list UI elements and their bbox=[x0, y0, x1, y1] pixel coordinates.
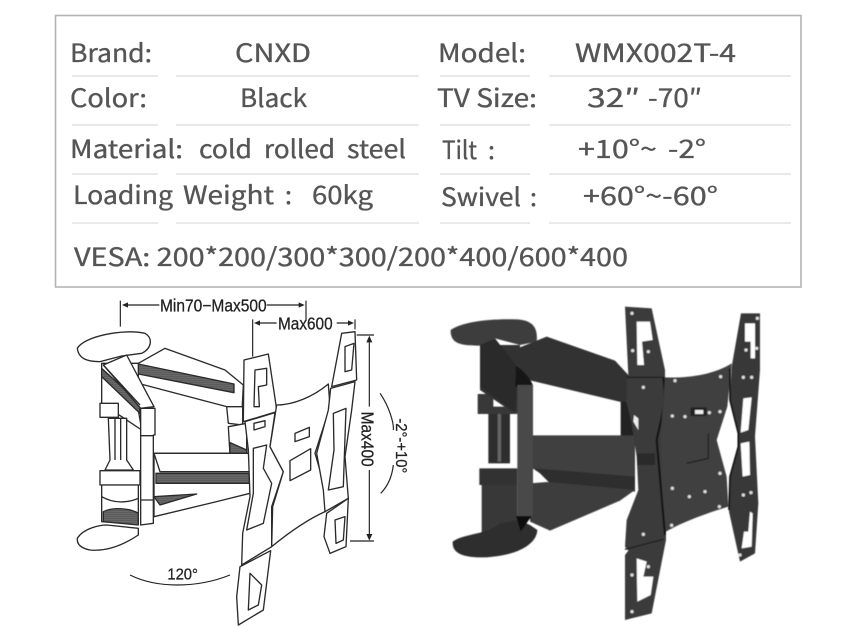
upper arm bbox=[517, 337, 628, 403]
dimension labels: Max400 bbox=[358, 412, 378, 467]
lower arms bbox=[621, 402, 635, 438]
text: tilt: Tilt bbox=[442, 131, 478, 167]
tv plate left bbox=[625, 307, 666, 620]
text: tv size: TV Size: bbox=[437, 79, 537, 115]
text: swivel: +60°~-60° bbox=[583, 177, 718, 213]
text: vesa sizes: VESA: 200*200/300*300/200*400/600*400 bbox=[74, 238, 628, 274]
text: loading weight bbox=[73, 176, 373, 212]
dimension labels: Min70−Max500 bbox=[160, 295, 267, 315]
text: material: Material: bbox=[70, 130, 183, 166]
text: material: steel bbox=[347, 130, 406, 166]
text: material: rolled bbox=[264, 130, 335, 166]
text: tilt: -2° bbox=[668, 130, 706, 166]
dimension labels: 120° bbox=[167, 566, 198, 583]
text: model: Model: bbox=[438, 34, 526, 70]
text: brand: Brand: bbox=[70, 34, 152, 70]
line art: central plate bbox=[270, 384, 330, 547]
text: tv size bbox=[437, 79, 702, 115]
text: swivel: Swivel bbox=[441, 178, 521, 214]
text: color: Color: bbox=[70, 79, 147, 115]
text: color: Black bbox=[240, 79, 307, 115]
central plate bbox=[661, 363, 732, 532]
text: swivel: : bbox=[530, 178, 537, 214]
mounting holes bbox=[630, 312, 759, 613]
text: tilt: : bbox=[488, 131, 495, 167]
text: tv size: -70″ bbox=[648, 79, 702, 115]
wall bracket bbox=[480, 345, 520, 413]
text: model: WMX002T-4 bbox=[575, 34, 736, 70]
text: tilt bbox=[442, 130, 706, 167]
dimension labels: Max600 bbox=[278, 313, 333, 333]
text: color bbox=[70, 79, 307, 115]
dimension labels: -2°-+10° bbox=[392, 418, 409, 473]
diagram: line drawing with dimensions bbox=[77, 295, 409, 625]
text: loading weight: : bbox=[285, 176, 292, 212]
text: material: cold bbox=[199, 130, 252, 166]
text: loading weight: 60kg bbox=[312, 176, 373, 212]
photo: black full-motion wall mount bbox=[451, 307, 760, 620]
panel: specification table bbox=[56, 16, 801, 287]
text: model bbox=[438, 34, 736, 70]
text: tilt: +10°~ bbox=[578, 130, 657, 166]
line art: right tv bracket bbox=[332, 332, 357, 387]
text: loading weight: Weight bbox=[183, 176, 275, 212]
text: loading weight: Loading bbox=[73, 176, 173, 212]
text: brand: CNXD bbox=[235, 34, 311, 70]
text: swivel bbox=[441, 177, 718, 214]
tv plate right bbox=[729, 313, 760, 562]
dimension labels bbox=[160, 295, 409, 583]
text: material bbox=[70, 130, 406, 166]
elbow column bbox=[515, 366, 533, 387]
line art: left tv bracket bbox=[243, 354, 277, 422]
text: tv size: 32″ bbox=[587, 79, 640, 115]
text: brand bbox=[70, 34, 311, 70]
dimension lines bbox=[120, 301, 393, 585]
line art: wall bracket and arms bbox=[77, 332, 357, 625]
wall column bbox=[488, 410, 510, 463]
